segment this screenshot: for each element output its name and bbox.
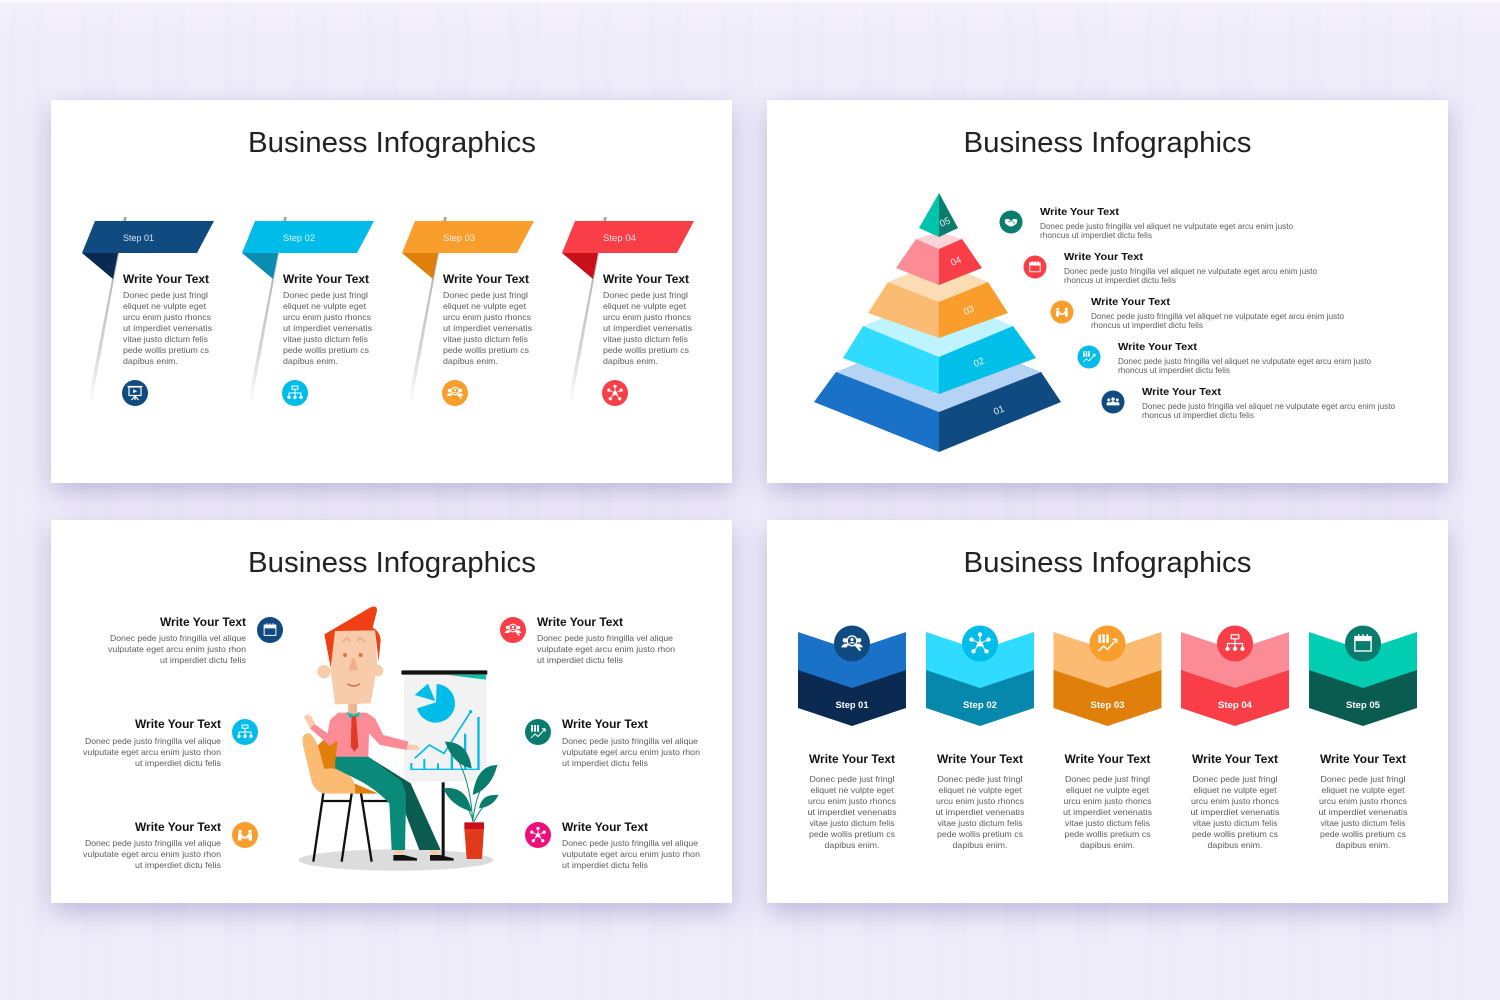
heading: Write Your Text	[283, 274, 369, 286]
icon: handshake	[1000, 210, 1022, 234]
description: vulputate eget arcu enim justo rhon	[83, 849, 221, 859]
level 05	[919, 193, 958, 237]
floor shadow	[299, 849, 493, 871]
banner fold	[562, 253, 598, 279]
icon: network hub	[962, 626, 998, 662]
description: vulputate eget arcu enim justo rhon	[108, 644, 246, 654]
icon: partners	[232, 822, 258, 848]
body text: vitae justo dictum felis	[938, 818, 1022, 828]
icon: growth	[1078, 346, 1100, 368]
heading: Write Your Text	[1091, 296, 1171, 308]
description: Donec pede justo fringilla vel alique	[562, 838, 698, 848]
icon: team	[1102, 390, 1124, 414]
level 02: 02	[972, 356, 986, 370]
body text: eliquet ne vulpte eget	[283, 301, 367, 311]
pyramid chart	[814, 193, 1061, 452]
icon: network hub	[525, 822, 551, 848]
body text: eliquet ne vulpte eget	[810, 785, 894, 795]
banner shadow	[88, 217, 127, 402]
body text: ut imperdiet venenatis	[123, 323, 212, 333]
body text: vitae justo dictum felis	[603, 334, 688, 344]
description: vulputate eget arcu enim justo rhon	[83, 747, 221, 757]
head	[317, 607, 383, 713]
body text: ut imperdiet venenatis	[1063, 807, 1152, 817]
item 02	[1078, 341, 1372, 375]
banner shadow	[408, 217, 447, 402]
description: Donec pede justo fringilla vel alique	[85, 736, 221, 746]
heading: Write Your Text	[1064, 251, 1144, 263]
heading: Write Your Text	[1118, 341, 1198, 353]
body text	[808, 774, 896, 850]
banner shadow	[248, 217, 287, 402]
step 04	[1181, 626, 1289, 850]
step 01 column	[82, 217, 214, 406]
panel: chevron steps	[767, 520, 1448, 903]
description: ut imperdiet dictu felis	[562, 758, 648, 768]
heading: Write Your Text	[562, 822, 648, 834]
icon: presentation	[122, 380, 148, 406]
body text: dapibus enim.	[1208, 840, 1262, 850]
step 02	[926, 626, 1034, 850]
chevron	[926, 632, 1034, 726]
description: ut imperdiet dictu felis	[537, 655, 623, 665]
body text: vitae justo dictum felis	[443, 334, 528, 344]
level 04: 04	[949, 255, 963, 269]
body text: pede wollis pretium cs	[809, 829, 895, 839]
body text: ut imperdiet venenatis	[443, 323, 532, 333]
chair	[303, 733, 389, 862]
step 03	[1054, 626, 1162, 850]
description	[537, 633, 675, 665]
description: Donec pede justo fringilla vel alique	[562, 736, 698, 746]
shirt and arms	[304, 712, 420, 757]
step label: Step 03	[1090, 700, 1124, 711]
panel: pyramid	[767, 100, 1448, 483]
body text: urcu enim justo rhoncs	[123, 312, 211, 322]
body text: pede wollis pretium cs	[123, 345, 209, 355]
description: rhoncus ut imperdiet dictu felis	[1091, 321, 1203, 330]
body text: ut imperdiet venenatis	[603, 323, 692, 333]
chevron	[798, 632, 906, 726]
description: ut imperdiet dictu felis	[135, 860, 221, 870]
description: ut imperdiet dictu felis	[135, 758, 221, 768]
body text: pede wollis pretium cs	[1192, 829, 1278, 839]
icon: org chart	[282, 380, 308, 406]
body text	[123, 290, 212, 366]
icon: calendar	[1024, 256, 1046, 278]
body text: Donec pede just fringl	[443, 290, 528, 300]
level 03	[868, 262, 1008, 338]
title: Business Infographics	[964, 547, 1252, 579]
body text: ut imperdiet venenatis	[1190, 807, 1280, 817]
right item 2	[525, 719, 700, 768]
item 05	[1000, 206, 1294, 240]
step label: Step 04	[1218, 700, 1253, 711]
body text: pede wollis pretium cs	[1320, 829, 1406, 839]
banner fold	[402, 253, 438, 279]
body text: eliquet ne vulpte eget	[1322, 785, 1405, 795]
title: Business Infographics	[248, 547, 536, 579]
description: rhoncus ut imperdiet dictu felis	[1040, 231, 1152, 240]
body text	[283, 290, 372, 366]
body text	[603, 290, 692, 366]
body text: urcu enim justo rhoncs	[1064, 796, 1152, 806]
body text: Donec pede just fringl	[1192, 774, 1278, 784]
step label: Step 01	[123, 233, 154, 243]
heading: Write Your Text	[1192, 754, 1278, 766]
illustration: businessman presenting	[299, 607, 498, 871]
description: ut imperdiet dictu felis	[160, 655, 246, 665]
body text: eliquet ne vulpte eget	[938, 785, 1022, 795]
body text	[1190, 774, 1280, 850]
body text: vitae justo dictum felis	[1320, 818, 1406, 828]
body text	[936, 774, 1024, 850]
description: Donec pede justo fringilla vel aliquet ne vulputate eget arcu enim justo	[1091, 312, 1345, 321]
body text: urcu enim justo rhoncs	[936, 796, 1024, 806]
panel: presenter illustration	[51, 520, 732, 903]
heading: Write Your Text	[443, 274, 529, 286]
description: Donec pede justo fringilla vel alique	[537, 633, 673, 643]
description: vulputate eget arcu enim justo rhon	[537, 644, 675, 654]
right item 3	[525, 822, 700, 870]
heading: Write Your Text	[123, 274, 209, 286]
heading: Write Your Text	[537, 617, 623, 629]
chevron	[1309, 632, 1417, 726]
body text: vitae justo dictum felis	[283, 334, 368, 344]
description: rhoncus ut imperdiet dictu felis	[1064, 276, 1176, 285]
step 01	[798, 626, 906, 850]
icon: calendar	[257, 617, 283, 643]
body text: dapibus enim.	[443, 356, 498, 366]
icon: org chart	[1217, 626, 1253, 662]
description: rhoncus ut imperdiet dictu felis	[1142, 411, 1254, 420]
body text: ut imperdiet venenatis	[808, 807, 896, 817]
heading: Write Your Text	[135, 822, 221, 834]
easel with chart	[401, 670, 487, 857]
heading: Write Your Text	[937, 754, 1023, 766]
body text: ut imperdiet venenatis	[936, 807, 1024, 817]
icon: people search	[442, 380, 468, 406]
description	[562, 736, 700, 768]
description	[1091, 312, 1345, 330]
item 04	[1024, 251, 1318, 285]
icon: org chart	[232, 719, 258, 745]
step label: Step 02	[283, 233, 315, 243]
level 01	[814, 330, 1061, 452]
body text: dapibus enim.	[824, 840, 880, 850]
body text: Donec pede just fringl	[123, 290, 208, 300]
body text: vitae justo dictum felis	[123, 334, 208, 344]
icon: growth	[525, 719, 551, 745]
body text: eliquet ne vulpte eget	[1066, 785, 1150, 795]
icon: people search	[500, 617, 526, 643]
body text	[1318, 774, 1408, 850]
banner	[562, 221, 694, 253]
description: ut imperdiet dictu felis	[562, 860, 648, 870]
banner	[82, 221, 214, 253]
body text: pede wollis pretium cs	[283, 345, 369, 355]
step 03 column	[402, 217, 534, 406]
item 01	[1102, 386, 1396, 420]
banner fold	[82, 253, 118, 279]
icon: network hub	[602, 380, 628, 406]
description: vulputate eget arcu enim justo rhon	[562, 849, 700, 859]
body text: dapibus enim.	[123, 356, 178, 366]
title: Business Infographics	[248, 127, 536, 159]
body text: pede wollis pretium cs	[603, 345, 689, 355]
level 04	[896, 232, 982, 285]
icon: people search	[834, 626, 870, 662]
potted plant	[443, 742, 498, 859]
body text: pede wollis pretium cs	[937, 829, 1023, 839]
step 05	[1309, 626, 1417, 850]
description: Donec pede justo fringilla vel alique	[85, 838, 221, 848]
step label: Step 04	[603, 233, 636, 243]
description: Donec pede justo fringilla vel aliquet ne vulputate eget arcu enim justo	[1142, 402, 1396, 411]
heading: Write Your Text	[1064, 754, 1151, 766]
body text: dapibus enim.	[952, 840, 1008, 850]
item 03	[1050, 296, 1345, 330]
description	[1040, 222, 1294, 240]
description	[83, 736, 221, 768]
body text: Donec pede just fringl	[810, 774, 895, 784]
heading: Write Your Text	[1320, 754, 1406, 766]
level 01: 01	[992, 404, 1006, 418]
description	[1142, 402, 1396, 420]
body text: urcu enim justo rhoncs	[443, 312, 531, 322]
chevron	[1054, 632, 1162, 726]
body text: urcu enim justo rhoncs	[603, 312, 691, 322]
body text: Donec pede just fringl	[938, 774, 1023, 784]
body text: dapibus enim.	[1336, 840, 1390, 850]
level 02	[843, 295, 1036, 394]
heading: Write Your Text	[135, 719, 221, 731]
step 04 column	[562, 217, 694, 406]
panel: step banners	[51, 100, 732, 483]
body text: vitae justo dictum felis	[1065, 818, 1150, 828]
trousers and legs	[335, 756, 454, 861]
description	[108, 633, 246, 665]
banner	[402, 221, 534, 253]
description: Donec pede justo fringilla vel aliquet ne vulputate eget arcu enim justo	[1064, 267, 1318, 276]
heading: Write Your Text	[160, 617, 246, 629]
description: Donec pede justo fringilla vel aliquet ne vulputate eget arcu enim justo	[1040, 222, 1294, 231]
icon: partners	[1050, 300, 1074, 324]
left item 1	[108, 617, 283, 665]
body text: urcu enim justo rhoncs	[1319, 796, 1407, 806]
left item 2	[83, 719, 258, 768]
description	[562, 838, 700, 870]
icon: growth	[1090, 626, 1126, 662]
body text: vitae justo dictum felis	[1192, 818, 1278, 828]
body text: eliquet ne vulpte eget	[603, 301, 687, 311]
body text: pede wollis pretium cs	[443, 345, 529, 355]
body text: dapibus enim.	[1080, 840, 1135, 850]
chevron	[1181, 632, 1289, 726]
step label: Step 05	[1346, 700, 1381, 711]
body text: ut imperdiet venenatis	[283, 323, 372, 333]
description	[1118, 357, 1372, 375]
heading: Write Your Text	[1142, 386, 1222, 398]
heading: Write Your Text	[1040, 206, 1120, 218]
step label: Step 01	[836, 700, 869, 711]
body text: urcu enim justo rhoncs	[1191, 796, 1279, 806]
level 05: 05	[938, 216, 952, 230]
description	[83, 838, 221, 870]
heading: Write Your Text	[809, 754, 895, 766]
heading: Write Your Text	[562, 719, 648, 731]
body text: dapibus enim.	[283, 356, 338, 366]
left item 3	[83, 822, 258, 870]
body text: dapibus enim.	[603, 356, 658, 366]
banner	[242, 221, 374, 253]
body text: vitae justo dictum felis	[810, 818, 894, 828]
body text	[1063, 774, 1152, 850]
description: Donec pede justo fringilla vel alique	[110, 633, 246, 643]
level 03: 03	[962, 304, 976, 318]
step 02 column	[242, 217, 374, 406]
title: Business Infographics	[964, 127, 1252, 159]
body text: Donec pede just fringl	[283, 290, 368, 300]
banner fold	[242, 253, 278, 279]
step label: Step 02	[963, 700, 997, 711]
body text: urcu enim justo rhoncs	[283, 312, 371, 322]
body text: eliquet ne vulpte eget	[123, 301, 207, 311]
body text: pede wollis pretium cs	[1064, 829, 1150, 839]
body text: Donec pede just fringl	[1065, 774, 1150, 784]
right item 1	[500, 617, 675, 665]
banner shadow	[568, 217, 607, 402]
body text: Donec pede just fringl	[1320, 774, 1406, 784]
body text: urcu enim justo rhoncs	[808, 796, 896, 806]
icon: calendar	[1345, 626, 1381, 662]
heading: Write Your Text	[603, 274, 689, 286]
body text: ut imperdiet venenatis	[1318, 807, 1408, 817]
body text	[443, 290, 532, 366]
body text: Donec pede just fringl	[603, 290, 688, 300]
description	[1064, 267, 1318, 285]
step label: Step 03	[443, 233, 475, 243]
description: vulputate eget arcu enim justo rhon	[562, 747, 700, 757]
body text: eliquet ne vulpte eget	[443, 301, 527, 311]
description: rhoncus ut imperdiet dictu felis	[1118, 366, 1230, 375]
body text: eliquet ne vulpte eget	[1194, 785, 1277, 795]
description: Donec pede justo fringilla vel aliquet ne vulputate eget arcu enim justo	[1118, 357, 1372, 366]
